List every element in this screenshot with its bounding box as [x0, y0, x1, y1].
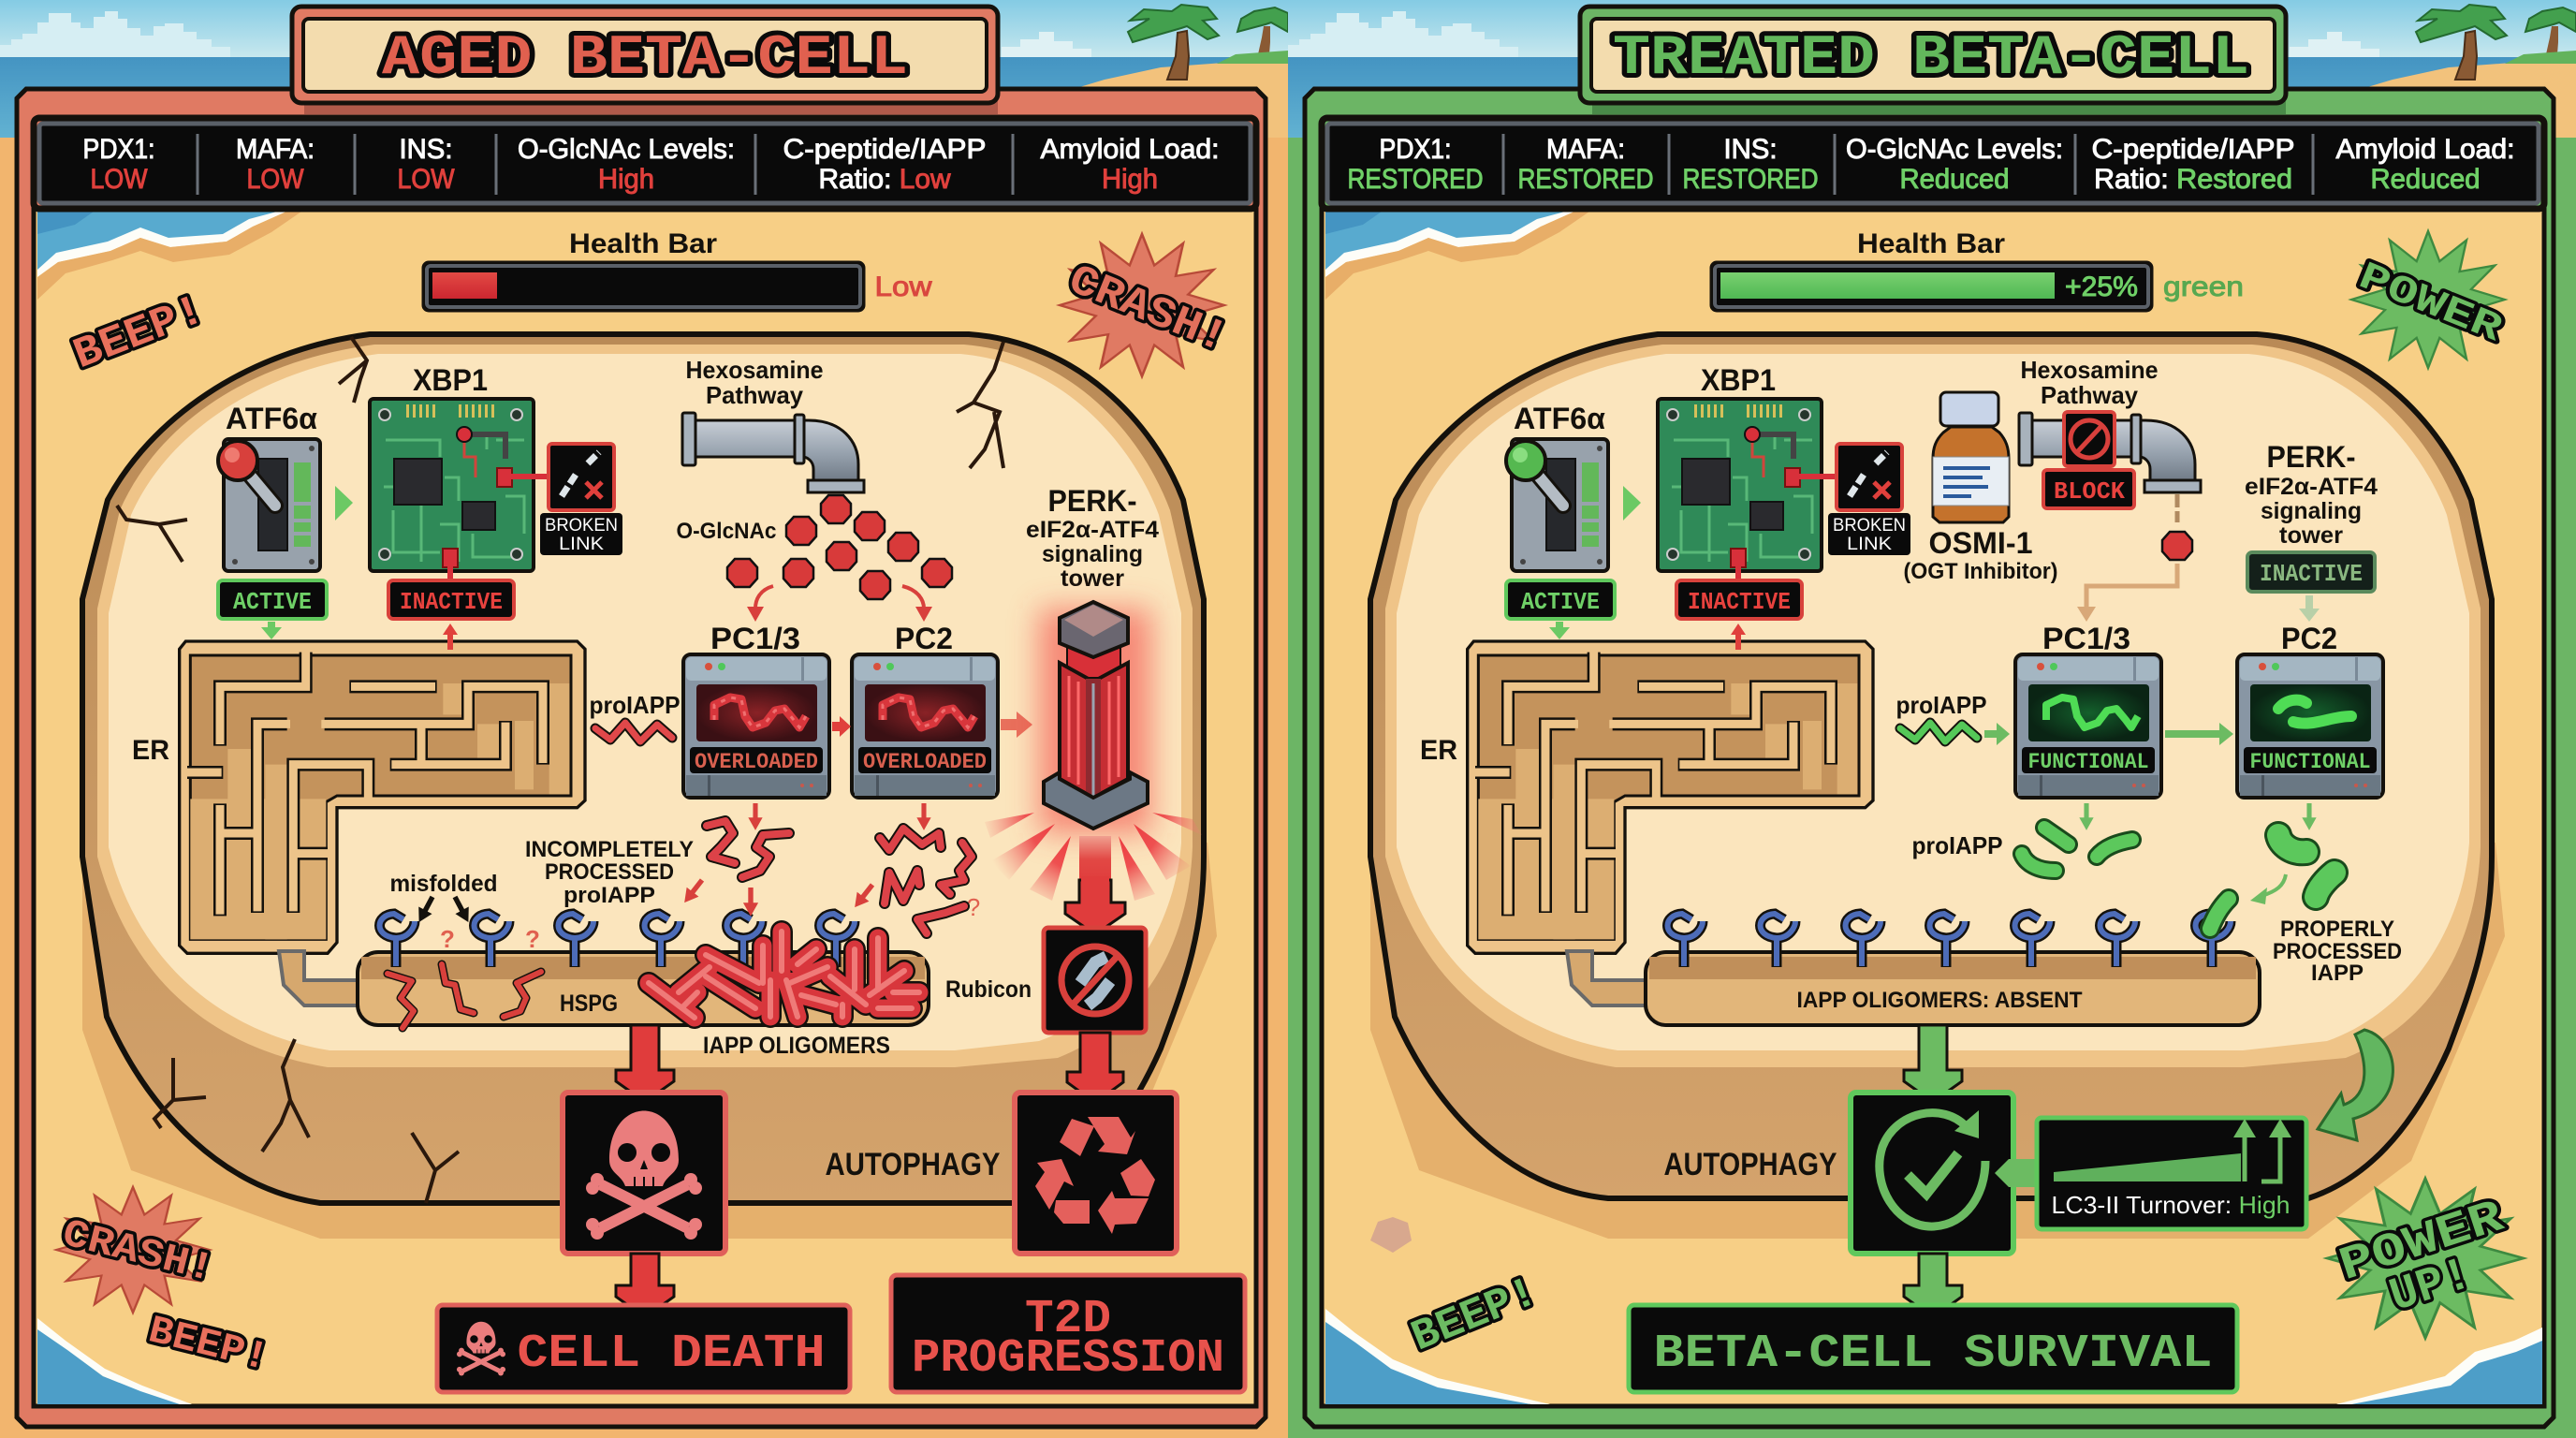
- badge: ACTIVE: ACTIVE: [233, 588, 312, 616]
- panel: treated beta-cell: [1288, 0, 2576, 1438]
- crash burst bottom: CRASH!: [58, 1211, 219, 1293]
- XBP1 chip: [370, 363, 549, 581]
- arrow: autophagy to survival: [1904, 1254, 1962, 1317]
- XBP1 chip: [1658, 363, 1837, 581]
- XBP1 chip: XBP1: [413, 363, 488, 397]
- pebble: [1370, 1217, 1412, 1253]
- stat: Amyloid: Amyloid Load:: [2336, 134, 2514, 165]
- badge: ACTIVE: [218, 580, 327, 619]
- broken link icon: BROKEN: [545, 516, 618, 536]
- badge: ACTIVE: ACTIVE: [1521, 588, 1600, 616]
- ER maze: [180, 641, 585, 1005]
- PERK tower: [1039, 602, 1151, 833]
- label: PC1/3: PC1/3: [710, 622, 800, 655]
- small red arrows: [679, 803, 931, 917]
- misfolded arrows: [412, 893, 476, 926]
- curved arrow to receptor: [2261, 874, 2286, 896]
- health bar: +25%: [2065, 271, 2138, 302]
- arrow: oligomers to death box: [616, 1025, 674, 1102]
- stat: INS: [397, 134, 455, 195]
- label: AUTOPHAGY: AUTOPHAGY: [826, 1147, 1001, 1182]
- stat: MAFA: [236, 134, 315, 195]
- label: incompletely processed proIAPP: proIAPP: [564, 883, 655, 908]
- label: incompletely processed proIAPP: INCOMPLETELY: [525, 837, 694, 862]
- arrow: PC1/3 to PC2: [2165, 723, 2233, 745]
- ATF6a lever: ATF6α: [1514, 402, 1605, 435]
- stat: Amyloid: Amyloid Load:: [1041, 134, 1219, 165]
- HSPG membrane: HSPG: [560, 990, 618, 1017]
- OSMI-1 bottle: OSMI-1: [1928, 526, 2033, 560]
- stat: MAFA: MAFA:: [236, 134, 315, 165]
- arrow: ER to inactive: [1731, 624, 1746, 650]
- arrow: faint: [2299, 595, 2320, 622]
- title text: AGED BETA-CELL: [382, 27, 908, 91]
- LC3-II turnover panel: LC3-II Turnover: High: [2052, 1191, 2290, 1219]
- stat: O-GlcNAc: Reduced: [1900, 164, 2009, 195]
- hexosamine pathway blocked: [2019, 356, 2201, 508]
- Rubicon block: Rubicon: [945, 976, 1032, 1003]
- label: misfolded: misfolded: [389, 871, 498, 897]
- label: properly processed IAPP: IAPP: [2311, 961, 2364, 986]
- PERK label: tower: [1061, 565, 1124, 592]
- T2D progression box: [891, 1275, 1245, 1392]
- broken link icon: [1828, 444, 1910, 555]
- PC2 monitor overloaded: OVERLOADED: [863, 750, 987, 774]
- cell body: [82, 334, 1217, 1239]
- title text: TREATED BETA-CELL: [1613, 27, 2249, 91]
- stats bar: [34, 118, 1256, 209]
- PERK label: tower: [2279, 522, 2343, 549]
- stat: O-GlcNAc: [1846, 134, 2063, 195]
- skull box: [563, 1093, 725, 1254]
- power burst top: [2351, 231, 2509, 368]
- power burst top: POWER: [2352, 255, 2509, 352]
- label: BEEP bottom: BEEP!: [144, 1308, 273, 1381]
- health bar: [423, 228, 932, 311]
- cell body: [1370, 334, 2505, 1239]
- arrow: lever to chip: [1623, 486, 1641, 521]
- question marks: ?: [525, 925, 540, 953]
- big curved arrow: [2318, 1030, 2393, 1140]
- crash burst top: CRASH!: [1061, 256, 1235, 363]
- cell wall cracks: [117, 337, 1003, 1203]
- badge: ACTIVE: [1506, 580, 1615, 619]
- stat: MAFA: MAFA:: [1546, 134, 1625, 165]
- stat: O-GlcNAc: High: [598, 164, 654, 195]
- T2D progression box: T2D: [1025, 1293, 1111, 1346]
- panel: aged beta-cell: [0, 0, 1288, 1438]
- question marks: ?: [440, 925, 455, 953]
- stat: PDX1: [82, 134, 155, 195]
- stat: MAFA: RESTORED: [1518, 164, 1653, 195]
- arrow: membrane to autophagy: [1904, 1025, 1962, 1102]
- stat: PDX1: LOW: [90, 164, 148, 195]
- autophagy check box: [1851, 1093, 2013, 1254]
- stat: PDX1: PDX1:: [1380, 134, 1451, 165]
- ER maze: [1468, 641, 1873, 1005]
- shoreline water top-left: [37, 212, 301, 300]
- arrow: PC1/3 to PC2: [832, 716, 851, 737]
- arrow: active to ER: [261, 622, 282, 639]
- hexosamine pathway blocked: Pathway: [2041, 381, 2139, 409]
- PERK label: signaling: [1042, 541, 1143, 567]
- arrow: PC2 to tower: [1001, 712, 1032, 738]
- label: ER: ER: [132, 735, 169, 766]
- hexosamine pathway blocked: BLOCK: [2054, 477, 2125, 506]
- small green arrows: [2079, 803, 2317, 830]
- cell death box: CELL DEATH: [517, 1328, 826, 1381]
- reduced O-GlcNAc flow: [2077, 494, 2192, 622]
- health bar: green: [2163, 271, 2244, 302]
- hexosamine pathway: [682, 356, 864, 492]
- HSPG receptors: [1668, 914, 2231, 967]
- hexosamine pathway: Pathway: [706, 381, 804, 409]
- label: incompletely processed proIAPP: [525, 837, 694, 908]
- arrow: skull to cell death: [616, 1254, 674, 1317]
- stat: C-peptide/IAPP: Ratio: Low: [818, 164, 951, 195]
- label: properly processed IAPP: PROCESSED: [2273, 939, 2402, 964]
- power up burst: POWER: [2334, 1191, 2510, 1294]
- power up burst: [2327, 1179, 2524, 1338]
- arrow: proIAPP to PC1/3: [1984, 723, 2010, 745]
- label: IAPP oligomers: IAPP OLIGOMERS: [703, 1033, 890, 1059]
- IAPP oligomer crystals: [649, 932, 919, 1018]
- HSPG receptors: [380, 914, 855, 967]
- label: PC2: PC2: [2281, 622, 2337, 655]
- proIAPP input: proIAPP: [590, 691, 680, 719]
- ATF6a lever: ATF6α: [226, 402, 317, 435]
- PERK label: eIF2α-ATF4: [2245, 474, 2378, 500]
- badge: INACTIVE: INACTIVE: [400, 588, 503, 616]
- stat: PDX1: [1348, 134, 1483, 195]
- recycling box: [1015, 1093, 1177, 1254]
- stat: INS: INS:: [1724, 134, 1777, 165]
- broken link icon: LINK: [1847, 535, 1892, 554]
- ATF6a lever: [218, 402, 320, 571]
- label: PC2: PC2: [895, 622, 953, 655]
- beta-cell survival box: [1629, 1305, 2237, 1392]
- stat: C-peptide/IAPP: C-peptide/IAPP: [783, 134, 987, 165]
- stat: C-peptide/IAPP: Ratio: Restored: [2094, 164, 2292, 195]
- membrane: IAPP OLIGOMERS: ABSENT: [1797, 988, 2083, 1013]
- PERK label: signaling: [2261, 498, 2362, 524]
- label: AUTOPHAGY: AUTOPHAGY: [1664, 1147, 1837, 1182]
- processed beans: [2022, 828, 2334, 897]
- PERK label: eIF2α-ATF4: [1026, 517, 1159, 543]
- health bar: Low: [874, 271, 932, 302]
- PC1/3 monitor functional: FUNCTIONAL: [2027, 750, 2149, 774]
- beach background: [1288, 0, 2576, 1438]
- arrow: active to ER: [1549, 622, 1570, 639]
- question marks: [440, 893, 980, 953]
- LC3-II turnover panel: [2037, 1118, 2306, 1229]
- stat: PDX1: PDX1:: [82, 134, 155, 165]
- stat: C-peptide/IAPP: [2091, 134, 2295, 195]
- broken link icon: LINK: [559, 535, 604, 554]
- health bar: [1711, 228, 2244, 311]
- arrowhead: [2250, 888, 2267, 904]
- OSMI-1 bottle: (OGT Inhibitor): [1904, 559, 2057, 584]
- OSMI-1 bottle: [1904, 392, 2057, 584]
- T2D progression box: PROGRESSION: [912, 1332, 1224, 1386]
- arrow: tower to Rubicon: [1065, 836, 1125, 934]
- stat: MAFA: LOW: [247, 164, 304, 195]
- badge: PERK INACTIVE: [2247, 552, 2375, 592]
- health bar: Health Bar: [569, 228, 717, 259]
- label: ER: ER: [1420, 735, 1457, 766]
- PC2 monitor functional: FUNCTIONAL: [2250, 750, 2370, 774]
- PC2 monitor overloaded: [852, 654, 998, 798]
- label: BEEP top: BEEP!: [67, 286, 212, 380]
- PC1/3 monitor overloaded: OVERLOADED: [695, 750, 818, 774]
- crash burst top: [1060, 234, 1235, 376]
- crash burst bottom: [56, 1187, 219, 1313]
- membrane: [1646, 952, 2260, 1025]
- arrow: lever to chip: [335, 486, 353, 521]
- stat: MAFA: [1518, 134, 1653, 195]
- hexosamine pathway blocked: Hexosamine: [2020, 356, 2159, 384]
- stat: C-peptide/IAPP: C-peptide/IAPP: [2091, 134, 2295, 165]
- water bottom corners: [1325, 1309, 2542, 1404]
- connector: LC3 to autophagy: [1995, 1159, 2040, 1187]
- broken link icon: BROKEN: [1833, 516, 1906, 536]
- shoreline water top-left: [1325, 212, 1589, 300]
- PC1/3 monitor functional: [2015, 654, 2161, 798]
- title plate: [292, 7, 998, 103]
- label: PC1/3: PC1/3: [2042, 622, 2130, 655]
- stat: INS: RESTORED: [1683, 164, 1818, 195]
- PC1/3 monitor overloaded: [683, 654, 829, 798]
- PERK label: PERK-: [1048, 484, 1136, 518]
- HSPG membrane: [358, 952, 929, 1025]
- stat: Amyloid: Reduced: [2370, 164, 2481, 195]
- stat: Amyloid: High: [1102, 164, 1158, 195]
- bound IAPP bean: [2210, 899, 2229, 929]
- label: proIAPP 2: proIAPP: [1911, 831, 2003, 859]
- rays from tower: [985, 813, 1202, 901]
- proIAPP input: [590, 691, 680, 741]
- label: properly processed IAPP: [2273, 917, 2402, 986]
- hexosamine pathway: Hexosamine: [685, 356, 824, 384]
- beta-cell survival box: BETA-CELL SURVIVAL: [1653, 1328, 2213, 1381]
- stat: INS: [1683, 134, 1818, 195]
- label: BEEP: BEEP!: [1405, 1269, 1544, 1362]
- title plate: [1580, 7, 2286, 103]
- PERK label: [2245, 440, 2378, 549]
- proIAPP input: proIAPP: [1896, 691, 1986, 719]
- PERK label: [1026, 484, 1159, 592]
- stat: C-peptide/IAPP: [783, 134, 987, 195]
- badge: INACTIVE: INACTIVE: [1688, 588, 1791, 616]
- stats bar: [1322, 118, 2544, 209]
- badge: PERK INACTIVE: INACTIVE: [2260, 560, 2363, 588]
- badge: INACTIVE: [388, 580, 514, 619]
- health bar: Health Bar: [1857, 228, 2005, 259]
- cell death box: [437, 1305, 850, 1392]
- stat: PDX1: RESTORED: [1348, 164, 1483, 195]
- stat: O-GlcNAc: [518, 134, 735, 195]
- PERK label: PERK-: [2267, 440, 2355, 474]
- broken link icon: [540, 444, 622, 555]
- stat: O-GlcNAc: O-GlcNAc Levels:: [1846, 134, 2063, 165]
- arrow: Rubicon to recycling: [1067, 1033, 1123, 1103]
- label: incompletely processed proIAPP: PROCESSED: [545, 859, 674, 885]
- label: properly processed IAPP: PROPERLY: [2280, 917, 2394, 942]
- stat: Amyloid: [2336, 134, 2514, 195]
- frame: [1305, 89, 2554, 1427]
- proIAPP input: [1896, 691, 1986, 741]
- arrow: ER to inactive: [443, 624, 458, 650]
- question marks: ?: [967, 893, 980, 921]
- XBP1 chip: XBP1: [1701, 363, 1776, 397]
- PC2 monitor functional: [2237, 654, 2383, 798]
- power up burst: UP!: [2383, 1248, 2479, 1325]
- Rubicon block: [945, 928, 1146, 1033]
- O-GlcNAc particles: [676, 495, 952, 622]
- red squiggles: [707, 821, 972, 933]
- frame: [17, 89, 1266, 1427]
- badge: INACTIVE: [1676, 580, 1802, 619]
- stat: O-GlcNAc: O-GlcNAc Levels:: [518, 134, 735, 165]
- ATF6a lever: [1506, 402, 1608, 571]
- stat: Amyloid: [1041, 134, 1219, 195]
- water bottom-left: [37, 1318, 192, 1404]
- beach background: [0, 0, 1288, 1438]
- stat: INS: LOW: [397, 164, 455, 195]
- stat: INS: INS:: [399, 134, 453, 165]
- misfolded squiggles: [388, 964, 541, 1028]
- O-GlcNAc particles: O-GlcNAc: [676, 519, 777, 544]
